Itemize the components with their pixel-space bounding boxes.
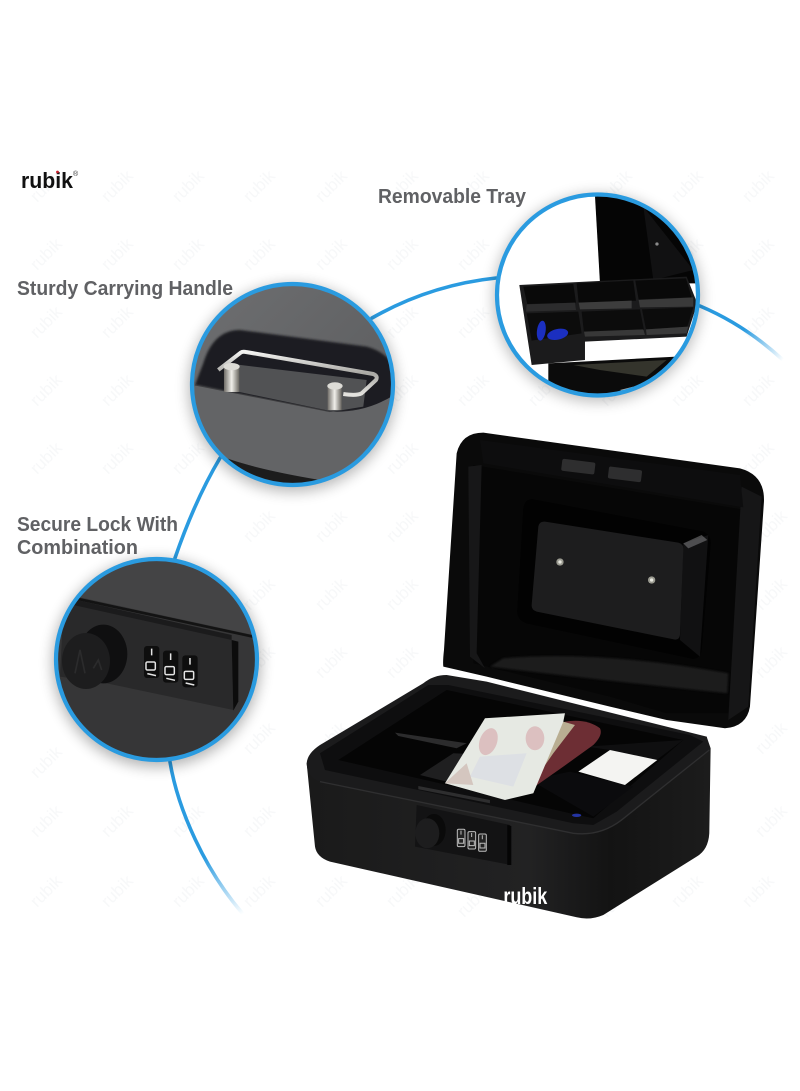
watermark pattern: rubik xyxy=(311,718,351,758)
latch slot xyxy=(418,786,490,803)
watermark pattern: rubik xyxy=(524,370,564,410)
watermark pattern: rubik xyxy=(382,871,422,911)
watermark pattern: rubik xyxy=(453,370,493,410)
watermark pattern: rubik xyxy=(311,642,351,682)
watermark pattern: rubik xyxy=(453,302,493,342)
watermark pattern: rubik xyxy=(382,438,422,478)
box rim xyxy=(307,675,709,834)
watermark pattern: rubik xyxy=(97,438,137,478)
watermark pattern: rubik xyxy=(97,166,137,206)
watermark pattern: rubik xyxy=(168,438,208,478)
combination dials xyxy=(144,646,198,687)
watermark pattern: rubik xyxy=(667,234,707,274)
bank notes xyxy=(530,721,601,790)
lock knob xyxy=(422,814,446,846)
watermark pattern: rubik xyxy=(382,370,422,410)
watermark pattern: rubik xyxy=(26,370,66,410)
watermark pattern: rubik xyxy=(168,166,208,206)
blue reflection xyxy=(572,814,581,817)
watermark pattern: rubik xyxy=(168,234,208,274)
watermark pattern: rubik xyxy=(738,871,778,911)
watermark pattern: rubik xyxy=(239,506,279,546)
inner plate xyxy=(532,522,683,640)
watermark pattern: rubik xyxy=(26,234,66,274)
watermark pattern: rubik xyxy=(239,718,279,758)
watermark pattern: rubik xyxy=(26,742,66,782)
panel: tray close-up xyxy=(494,194,702,402)
watermark pattern: rubik xyxy=(311,871,351,911)
watermark pattern: rubik xyxy=(751,718,791,758)
rivets xyxy=(556,558,564,566)
watermark pattern: rubik xyxy=(311,574,351,614)
watermark pattern: rubik xyxy=(453,881,493,921)
watermark pattern: rubik xyxy=(168,801,208,841)
watermark pattern: rubik xyxy=(311,506,351,546)
tray body xyxy=(519,277,697,365)
label: secure lock with combination: Combination xyxy=(17,537,138,559)
watermark pattern: rubik xyxy=(738,234,778,274)
watermark pattern: rubik xyxy=(26,166,66,206)
panel: handle close-up xyxy=(188,282,397,492)
recessed panel xyxy=(517,499,711,659)
watermark pattern: rubik xyxy=(239,642,279,682)
watermark pattern: rubik xyxy=(382,302,422,342)
watermark pattern: rubik xyxy=(168,871,208,911)
product photo: open black cash box xyxy=(307,433,764,919)
watermark pattern: rubik xyxy=(239,574,279,614)
watermark pattern: rubik xyxy=(97,801,137,841)
watermark pattern: rubik xyxy=(751,801,791,841)
connector curves xyxy=(170,278,783,914)
open lid xyxy=(443,433,764,728)
watermark pattern: rubik xyxy=(311,166,351,206)
watermark pattern: rubik xyxy=(239,871,279,911)
watermark pattern: rubik xyxy=(382,642,422,682)
watermark pattern: rubik xyxy=(26,801,66,841)
watermark pattern: rubik xyxy=(382,506,422,546)
watermark pattern: rubik xyxy=(382,574,422,614)
watermark pattern: rubik xyxy=(382,166,422,206)
lid slots xyxy=(561,459,596,475)
handle bar xyxy=(218,352,377,395)
blue pills xyxy=(536,320,546,341)
watermark pattern: rubik xyxy=(738,370,778,410)
watermark pattern: rubik xyxy=(97,871,137,911)
watermark pattern: rubik xyxy=(738,438,778,478)
lock dials xyxy=(457,829,486,851)
watermark pattern: rubik xyxy=(239,234,279,274)
watermark pattern: rubik xyxy=(26,438,66,478)
watermark pattern: rubik xyxy=(382,234,422,274)
watermark pattern: rubik xyxy=(667,370,707,410)
label: removable tray: Removable Tray xyxy=(378,186,527,208)
open lid xyxy=(595,196,702,283)
watermark pattern: rubik xyxy=(311,438,351,478)
watermark pattern: rubik xyxy=(596,881,636,921)
lock plate xyxy=(415,805,511,865)
label: sturdy carrying handle: Sturdy Carrying Handle xyxy=(17,278,233,300)
watermark pattern: rubik xyxy=(596,370,636,410)
watermark pattern: rubik xyxy=(26,871,66,911)
watermark pattern: rubik xyxy=(97,234,137,274)
brand logo: rubik: rubik xyxy=(21,168,74,193)
watermark pattern: rubik xyxy=(453,234,493,274)
label: secure lock with combination: Secure Lock With xyxy=(17,514,178,536)
box body xyxy=(307,675,711,919)
watermark pattern: rubik xyxy=(751,506,791,546)
watermark pattern: rubik xyxy=(453,166,493,206)
watermark pattern: rubik xyxy=(738,302,778,342)
tray interior xyxy=(338,690,683,818)
panel: combination lock close-up xyxy=(52,557,260,767)
white card xyxy=(578,750,657,785)
logo on box: rubik xyxy=(503,883,548,909)
watermark pattern: rubik xyxy=(239,166,279,206)
handle posts xyxy=(224,367,239,392)
watermark pattern: rubik xyxy=(239,801,279,841)
brand logo: rubik: ® xyxy=(73,170,79,178)
watermark pattern: rubik xyxy=(26,302,66,342)
watermark pattern: rubik xyxy=(667,166,707,206)
dark recess band xyxy=(195,330,397,413)
watermark pattern: rubik xyxy=(97,302,137,342)
watermark pattern: rubik xyxy=(751,642,791,682)
label: secure lock with combination xyxy=(17,514,178,559)
watermark pattern: rubik xyxy=(97,370,137,410)
watermark pattern: rubik xyxy=(667,871,707,911)
watermark pattern: rubik xyxy=(751,574,791,614)
lock plate xyxy=(60,603,233,710)
watermark pattern: rubik xyxy=(311,234,351,274)
watermark pattern xyxy=(26,166,791,921)
box below xyxy=(548,356,674,394)
knob xyxy=(86,624,128,684)
watermark pattern: rubik xyxy=(738,166,778,206)
watermark pattern: rubik xyxy=(596,166,636,206)
